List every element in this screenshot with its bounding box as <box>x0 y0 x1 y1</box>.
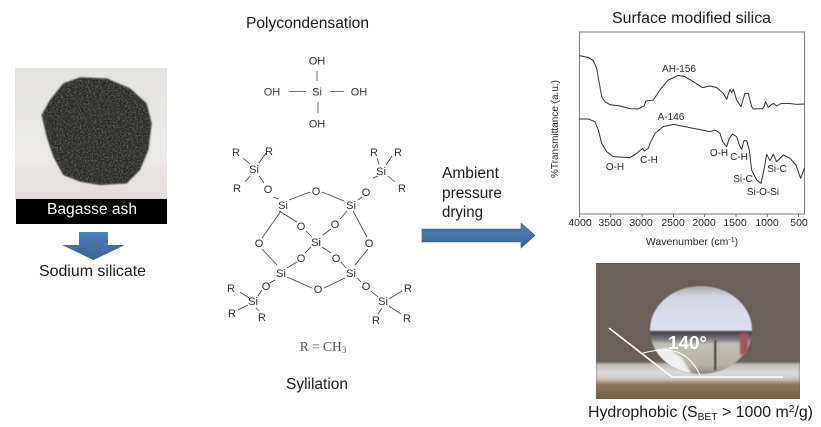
label: hydrophobic surface area: > 1000 m <box>718 404 789 421</box>
x-axis tick labels: 1000 <box>755 217 779 229</box>
label: hydrophobic surface area: 2 <box>789 404 795 415</box>
caption bar: Bagasse ash <box>16 199 167 224</box>
chemical structure: silylated silica cluster: R <box>370 147 378 159</box>
chemical structure: silylated silica cluster: Si <box>248 296 258 308</box>
chemical structure: silicic acid: Si <box>312 86 322 98</box>
x-axis title: Wavenumber (cm <box>646 236 728 248</box>
chemical structure: silylated silica cluster: Si <box>278 200 288 212</box>
peak labels: Si-C <box>767 164 787 175</box>
peak labels: AH-156 <box>662 64 696 75</box>
heading: surface modified silica: Surface modified silica <box>612 10 771 27</box>
label: hydrophobic surface area: BET <box>698 412 718 423</box>
caption bar: Bagasse ash: Bagasse ash <box>47 201 137 218</box>
chemical structure: silylated silica cluster: R <box>265 146 273 158</box>
droplet reflections <box>651 333 748 374</box>
contact angle lines <box>609 328 783 377</box>
label: ambient pressure drying: drying <box>442 204 483 221</box>
chemical structure: silicic acid: OH <box>264 86 280 98</box>
chemical structure: silicic acid: OH <box>309 118 325 130</box>
heading: polycondensation: Polycondensation <box>246 15 369 32</box>
photo background <box>596 263 800 399</box>
x-axis tick labels: 3500 <box>598 217 622 229</box>
sample surface <box>596 363 800 401</box>
chemical structure: silylated silica cluster: O <box>362 187 371 199</box>
chemical structure: silylated silica cluster: Si <box>249 164 259 176</box>
chemical structure: silylated silica cluster: O <box>312 186 321 198</box>
chemical structure: silylated silica cluster: Si <box>378 296 388 308</box>
chemical structure: silylated silica cluster: R <box>398 183 406 195</box>
ash pile <box>42 77 152 185</box>
formula: R = CH3: 3 <box>342 345 347 355</box>
chemical structure: silicic acid: OH <box>309 56 325 68</box>
chemical structure: silylated silica cluster: Si <box>376 166 386 178</box>
arrow: down to sodium silicate <box>62 232 125 260</box>
panel: water droplet photo <box>596 263 800 401</box>
label: ambient pressure drying <box>442 165 502 221</box>
chemical structure: silylated silica cluster: R <box>228 308 236 320</box>
label: ambient pressure drying: pressure <box>442 185 502 202</box>
peak labels: Si-O-Si <box>747 187 779 198</box>
label: hydrophobic surface area: Hydrophobic (S <box>588 404 695 421</box>
chemical structure: silylated silica cluster: O <box>255 238 264 250</box>
curve: A-146 <box>579 119 804 183</box>
peak labels: A-146 <box>658 112 685 123</box>
chemical structure: silylated silica cluster: O <box>297 221 306 233</box>
chemical structure: silylated silica cluster: R <box>404 283 412 295</box>
y-axis title: %Transmittance (a.u.) <box>550 80 561 178</box>
chart: FTIR spectra <box>550 32 808 248</box>
x-axis tick labels <box>568 217 808 229</box>
photo background <box>15 68 167 199</box>
peak labels: C-H <box>730 152 748 163</box>
peak labels: O-H <box>710 148 728 159</box>
chemical structure: silylated silica cluster: O <box>297 253 306 265</box>
chemical structure: silylated silica cluster: O <box>332 253 341 265</box>
peak labels: C-H <box>640 155 658 166</box>
x-axis tick labels: 500 <box>790 217 808 229</box>
label: sodium silicate: Sodium silicate <box>39 263 146 280</box>
peak labels <box>606 64 787 198</box>
droplet <box>650 286 752 374</box>
chemical structure: silylated silica cluster: Si <box>346 200 356 212</box>
x-axis tick labels: 2500 <box>661 217 685 229</box>
chemical structure: silylated silica cluster: O <box>314 284 323 296</box>
chemical structure: silylated silica cluster: O <box>362 281 371 293</box>
chemical structure: silylated silica cluster: R <box>227 283 235 295</box>
peak labels: Si-C <box>733 174 753 185</box>
x-axis tick labels: 2000 <box>692 217 716 229</box>
x-axis title: ) <box>735 236 738 248</box>
chemical structure: silylated silica cluster: O <box>262 281 271 293</box>
chemical structure: silylated silica cluster: Si <box>276 268 286 280</box>
peak labels: O-H <box>606 162 624 173</box>
chart frame <box>580 32 804 214</box>
chemical structure: silylated silica cluster: R <box>403 313 411 325</box>
panel: bagasse ash photo <box>15 68 167 224</box>
x-axis tick labels: 3000 <box>629 217 653 229</box>
arrow: ambient pressure drying <box>422 223 535 248</box>
x-axis tick labels: 4000 <box>568 217 592 229</box>
heading: sylilation: Sylilation <box>286 376 348 393</box>
chemical structure: silylated silica cluster: O <box>365 238 374 250</box>
chemical structure: silylated silica cluster: R <box>258 312 266 324</box>
chemical structure: silylated silica cluster: O <box>331 219 340 231</box>
x-axis tick labels: 1500 <box>723 217 747 229</box>
chemical structure: silylated silica cluster: Si <box>311 237 321 249</box>
chemical structure: silylated silica cluster: R <box>233 183 241 195</box>
chemical structure: silylated silica cluster: R <box>394 147 402 159</box>
contact angle value: 140° <box>668 333 707 353</box>
chemical structure: silylated silica cluster: O <box>264 184 273 196</box>
chemical structure: silicic acid <box>264 56 367 130</box>
x-axis title: -1 <box>728 237 735 244</box>
curve: AH-156 <box>579 56 804 109</box>
chemical structure: silylated silica cluster: R <box>232 147 240 159</box>
chemical structure: silicic acid: OH <box>351 86 367 98</box>
chemical structure: silylated silica cluster: R <box>372 315 380 327</box>
chemical structure: silylated silica cluster: Si <box>346 268 356 280</box>
formula: R = CH3: R = CH <box>300 339 342 354</box>
chemical structure: silylated silica cluster <box>227 146 412 327</box>
label: ambient pressure drying: Ambient <box>442 165 500 182</box>
label: hydrophobic surface area: /g) <box>794 404 813 421</box>
